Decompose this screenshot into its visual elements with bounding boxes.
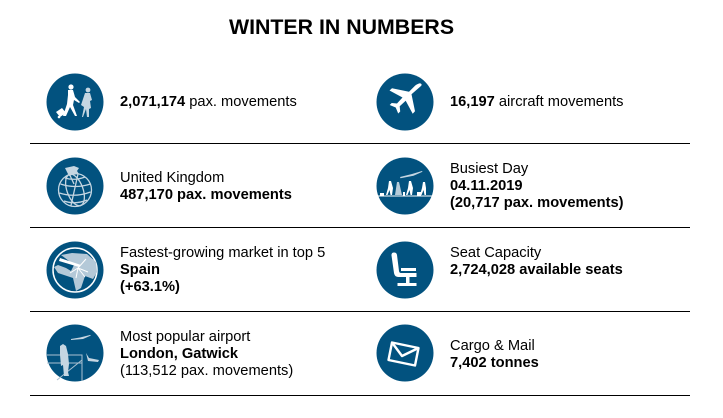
text: most popular airport: London, Gatwick [120, 346, 238, 362]
icon: aircraft seat [376, 242, 434, 298]
text: aircraft movements: 16,197 aircraft movements [450, 94, 624, 110]
text: cargo and mail [450, 338, 539, 371]
text: busiest day [450, 161, 624, 211]
text: most popular airport: Most popular airport [120, 329, 250, 345]
text: fastest-growing market: Fastest-growing market in top 5 [120, 245, 325, 261]
text: most popular airport: (113,512 pax. movements) [120, 363, 293, 379]
icon: globe with flag [46, 158, 104, 214]
text: seat capacity [450, 245, 623, 278]
icon: envelope [376, 324, 434, 382]
icon: people walking and plane [376, 158, 434, 214]
text: United Kingdom [120, 170, 292, 203]
text: seat capacity: 2,724,028 available seats [450, 262, 623, 278]
title: WINTER IN NUMBERS [229, 15, 454, 39]
text: cargo and mail: 7,402 tonnes [450, 355, 539, 371]
text: United Kingdom: United Kingdom [120, 170, 224, 186]
text: passenger movements: 2,071,174 pax. movements [120, 94, 297, 110]
icon: viewer watching planes [46, 324, 104, 382]
text: busiest day: Busiest Day [450, 161, 528, 177]
icon: aircraft [376, 74, 434, 130]
icon: passengers walking [46, 74, 104, 130]
text: busiest day: 04.11.2019 [450, 178, 523, 194]
text: seat capacity: Seat Capacity [450, 245, 541, 261]
text: most popular airport [120, 329, 293, 379]
text: busiest day: (20,717 pax. movements) [450, 195, 624, 211]
text: fastest-growing market [120, 245, 325, 295]
text: cargo and mail: Cargo & Mail [450, 338, 535, 354]
text: fastest-growing market: Spain [120, 262, 160, 278]
icon: world map with plane [46, 242, 104, 298]
text: fastest-growing market: (+63.1%) [120, 279, 180, 295]
text: United Kingdom: 487,170 pax. movements [120, 187, 292, 203]
